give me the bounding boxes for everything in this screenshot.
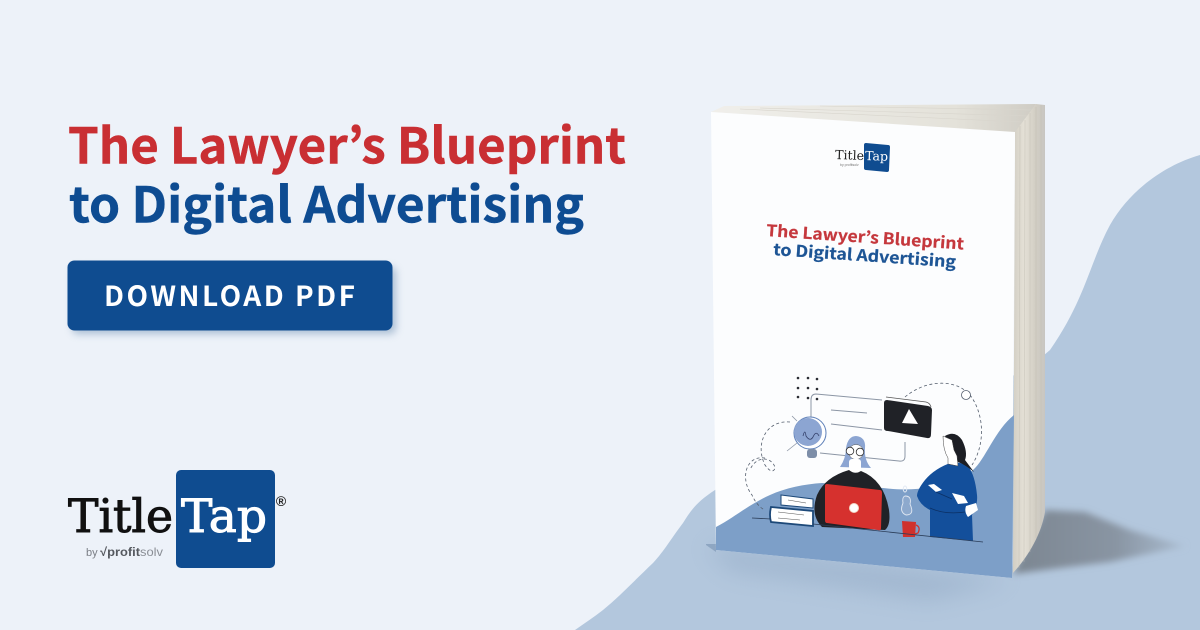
lightbulb bbox=[787, 416, 797, 451]
book pages top bbox=[711, 104, 1036, 133]
person with crossed arms bbox=[917, 462, 977, 541]
logo: TitleTap: Tap bbox=[181, 489, 267, 543]
logo: TitleTap bbox=[68, 470, 287, 568]
logo: TitleTap: ® bbox=[276, 493, 287, 509]
download button: DOWNLOAD PDF bbox=[104, 275, 355, 315]
logo: TitleTap: by bbox=[86, 547, 98, 559]
book shadow bbox=[1013, 510, 1185, 574]
title: The Lawyer’s Blueprint bbox=[68, 108, 626, 178]
book cover bbox=[711, 112, 1015, 578]
laptop bbox=[825, 484, 882, 530]
dashed lines bbox=[746, 383, 982, 510]
cover logo: Tap bbox=[865, 148, 888, 164]
download button bbox=[68, 260, 396, 334]
cover logo bbox=[835, 143, 890, 172]
person at laptop bbox=[840, 436, 871, 468]
title: to Digital Advertising bbox=[69, 166, 584, 238]
illustration bbox=[746, 377, 983, 542]
chat bubble bbox=[811, 394, 905, 461]
cover wave bbox=[716, 415, 1014, 578]
video panel bbox=[886, 397, 931, 407]
book pages side bbox=[1013, 104, 1045, 573]
desk line bbox=[752, 518, 983, 542]
books bbox=[781, 495, 813, 508]
book base ledge bbox=[706, 544, 716, 552]
cover title bbox=[766, 217, 965, 272]
background wave bbox=[575, 155, 1200, 630]
vase bbox=[902, 486, 912, 515]
cover logo: Title bbox=[835, 147, 864, 163]
cover title: The Lawyer’s Blueprint bbox=[766, 217, 965, 254]
dots bbox=[797, 377, 818, 400]
title bbox=[68, 108, 626, 238]
cover title: to Digital Advertising bbox=[773, 236, 957, 272]
logo: TitleTap: Title bbox=[68, 489, 173, 543]
mug bbox=[902, 521, 916, 537]
cover logo: by profitsolv bbox=[840, 163, 859, 167]
book bbox=[711, 104, 1045, 578]
logo: TitleTap: √profitsolv bbox=[100, 545, 163, 559]
